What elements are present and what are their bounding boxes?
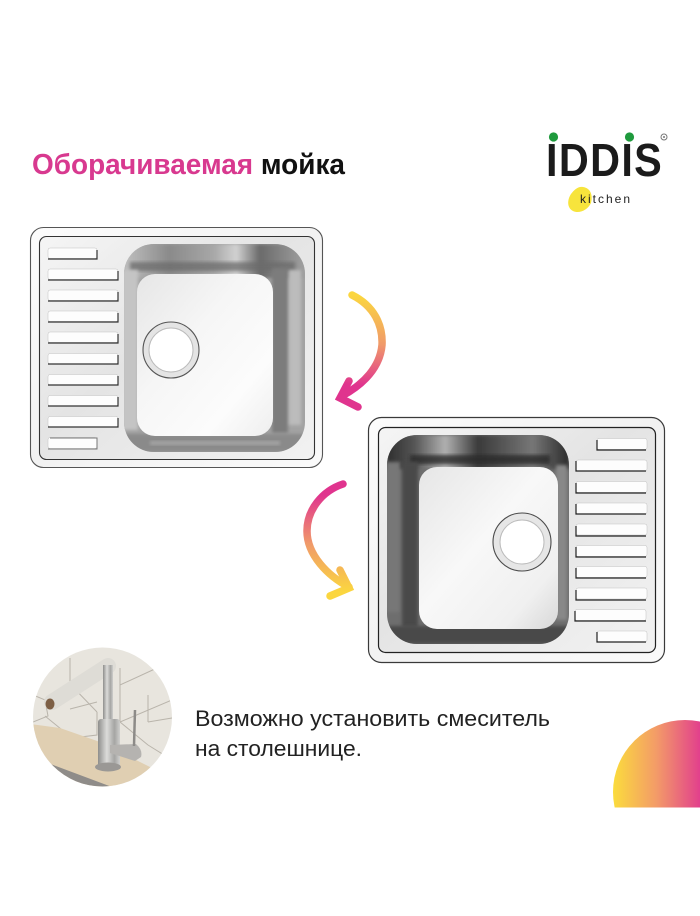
photo countertop [34,724,150,786]
sink 2 rim [368,418,664,662]
sink 2 bowl [386,435,569,644]
sink 2 drainboard ribs [575,438,647,642]
photo faucet spout [52,666,108,702]
sink 1 drainboard ribs [48,248,118,448]
caption: Возможно установить смеситель [195,706,550,731]
corner gradient circle [613,720,700,808]
arrow: top sink turning down [340,295,382,407]
sink 1 inner line [40,236,314,460]
logo yellow blob [568,187,592,212]
title: Оборачиваемая мойка [32,149,346,181]
sink 2 inner line [378,428,656,652]
logo subtitle: kitchen [580,192,630,206]
sink 2 bowl floor [419,467,558,629]
photo wall tiles [33,648,172,768]
logo green dots [549,132,634,142]
sink 1 bowl [122,244,305,452]
arrow: bottom sink turning down [307,484,349,596]
logo wordmark: IDDIS [546,135,663,187]
photo faucet body [98,719,120,767]
photo faucet handle [110,744,141,761]
photo faucet base [95,762,121,772]
sink: left drainboard position [30,228,322,468]
photo faucet neck [103,665,113,721]
caption: на столешнице. [195,736,362,761]
photo faucet lever [134,710,135,746]
photo spout tip [46,698,54,710]
registered mark [661,134,667,140]
sink: right drainboard position [368,418,664,662]
photo: faucet on countertop [30,647,173,795]
sink 1 bowl floor [137,274,273,436]
sink 1 rim [30,228,322,468]
logo: IDDIS kitchen [546,132,667,212]
sink 2 drain [493,513,551,571]
sink 1 drain [143,322,199,378]
photo sink edge [52,764,110,786]
